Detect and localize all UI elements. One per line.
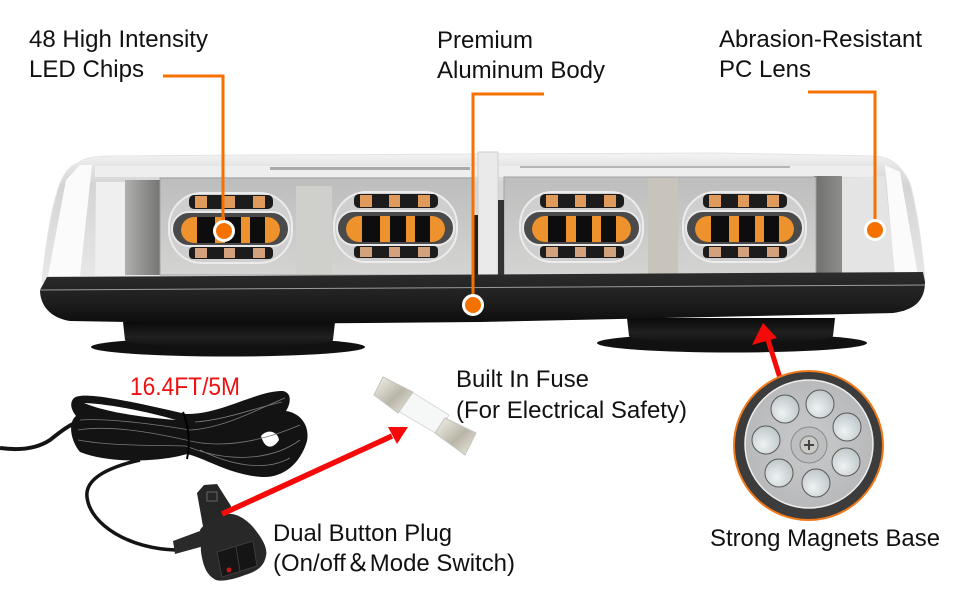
cable length label: 16.4FT/5M xyxy=(130,373,240,401)
white gaps between strands xyxy=(261,432,279,447)
callout: PC lens: PC Lens xyxy=(719,56,811,83)
plug label: (On/off＆Mode Switch) xyxy=(273,550,515,577)
strand highlights xyxy=(78,398,300,466)
icon: glass fuse xyxy=(374,377,476,455)
magnets xyxy=(752,390,861,497)
magnetic foot: right xyxy=(597,318,867,352)
plug label: Dual Button Plug xyxy=(273,520,452,547)
label: Premium xyxy=(437,27,533,54)
lead to plug xyxy=(87,460,176,550)
leader line xyxy=(473,94,544,305)
icon: coiled power cable xyxy=(0,391,308,550)
callout: aluminum body xyxy=(437,27,605,314)
end cap right xyxy=(435,418,476,455)
plug label xyxy=(273,520,515,577)
callout: LED chips xyxy=(29,26,234,240)
leader line xyxy=(808,92,875,230)
callout: LED chips: LED Chips xyxy=(29,56,144,83)
marker xyxy=(866,220,884,240)
light bar xyxy=(40,152,925,356)
dark base xyxy=(40,272,925,324)
cable bundle xyxy=(71,391,308,477)
end cap left xyxy=(374,377,413,413)
arrow: plug to fuse xyxy=(222,427,408,514)
fuse label: (For Electrical Safety) xyxy=(456,397,687,424)
magnets label: Strong Magnets Base xyxy=(710,525,940,552)
label: 48 High Intensity xyxy=(29,26,208,53)
tip xyxy=(197,484,231,532)
marker xyxy=(464,296,482,314)
mounting brackets xyxy=(125,180,163,275)
fuse label: Built In Fuse xyxy=(456,366,589,393)
fuse label xyxy=(456,366,687,424)
strain relief xyxy=(173,531,204,554)
center screw xyxy=(791,427,827,463)
LED module panels xyxy=(160,178,472,275)
clear lens housing xyxy=(42,153,925,282)
body xyxy=(200,514,266,581)
icon: car plug xyxy=(173,484,266,581)
callout: aluminum body: Aluminum Body xyxy=(437,57,605,84)
magnet base detail xyxy=(734,371,883,520)
callout: PC lens xyxy=(719,26,922,240)
leader line xyxy=(163,76,223,231)
lead to bar xyxy=(0,420,82,449)
switch xyxy=(217,541,257,577)
label: Abrasion-Resistant xyxy=(719,26,922,53)
LED chip clusters xyxy=(169,193,292,263)
glass tube xyxy=(398,392,449,434)
marker xyxy=(214,222,234,240)
magnetic foot: left xyxy=(91,322,365,356)
arrow: magnets to foot xyxy=(752,323,780,378)
cable tie xyxy=(183,412,189,459)
